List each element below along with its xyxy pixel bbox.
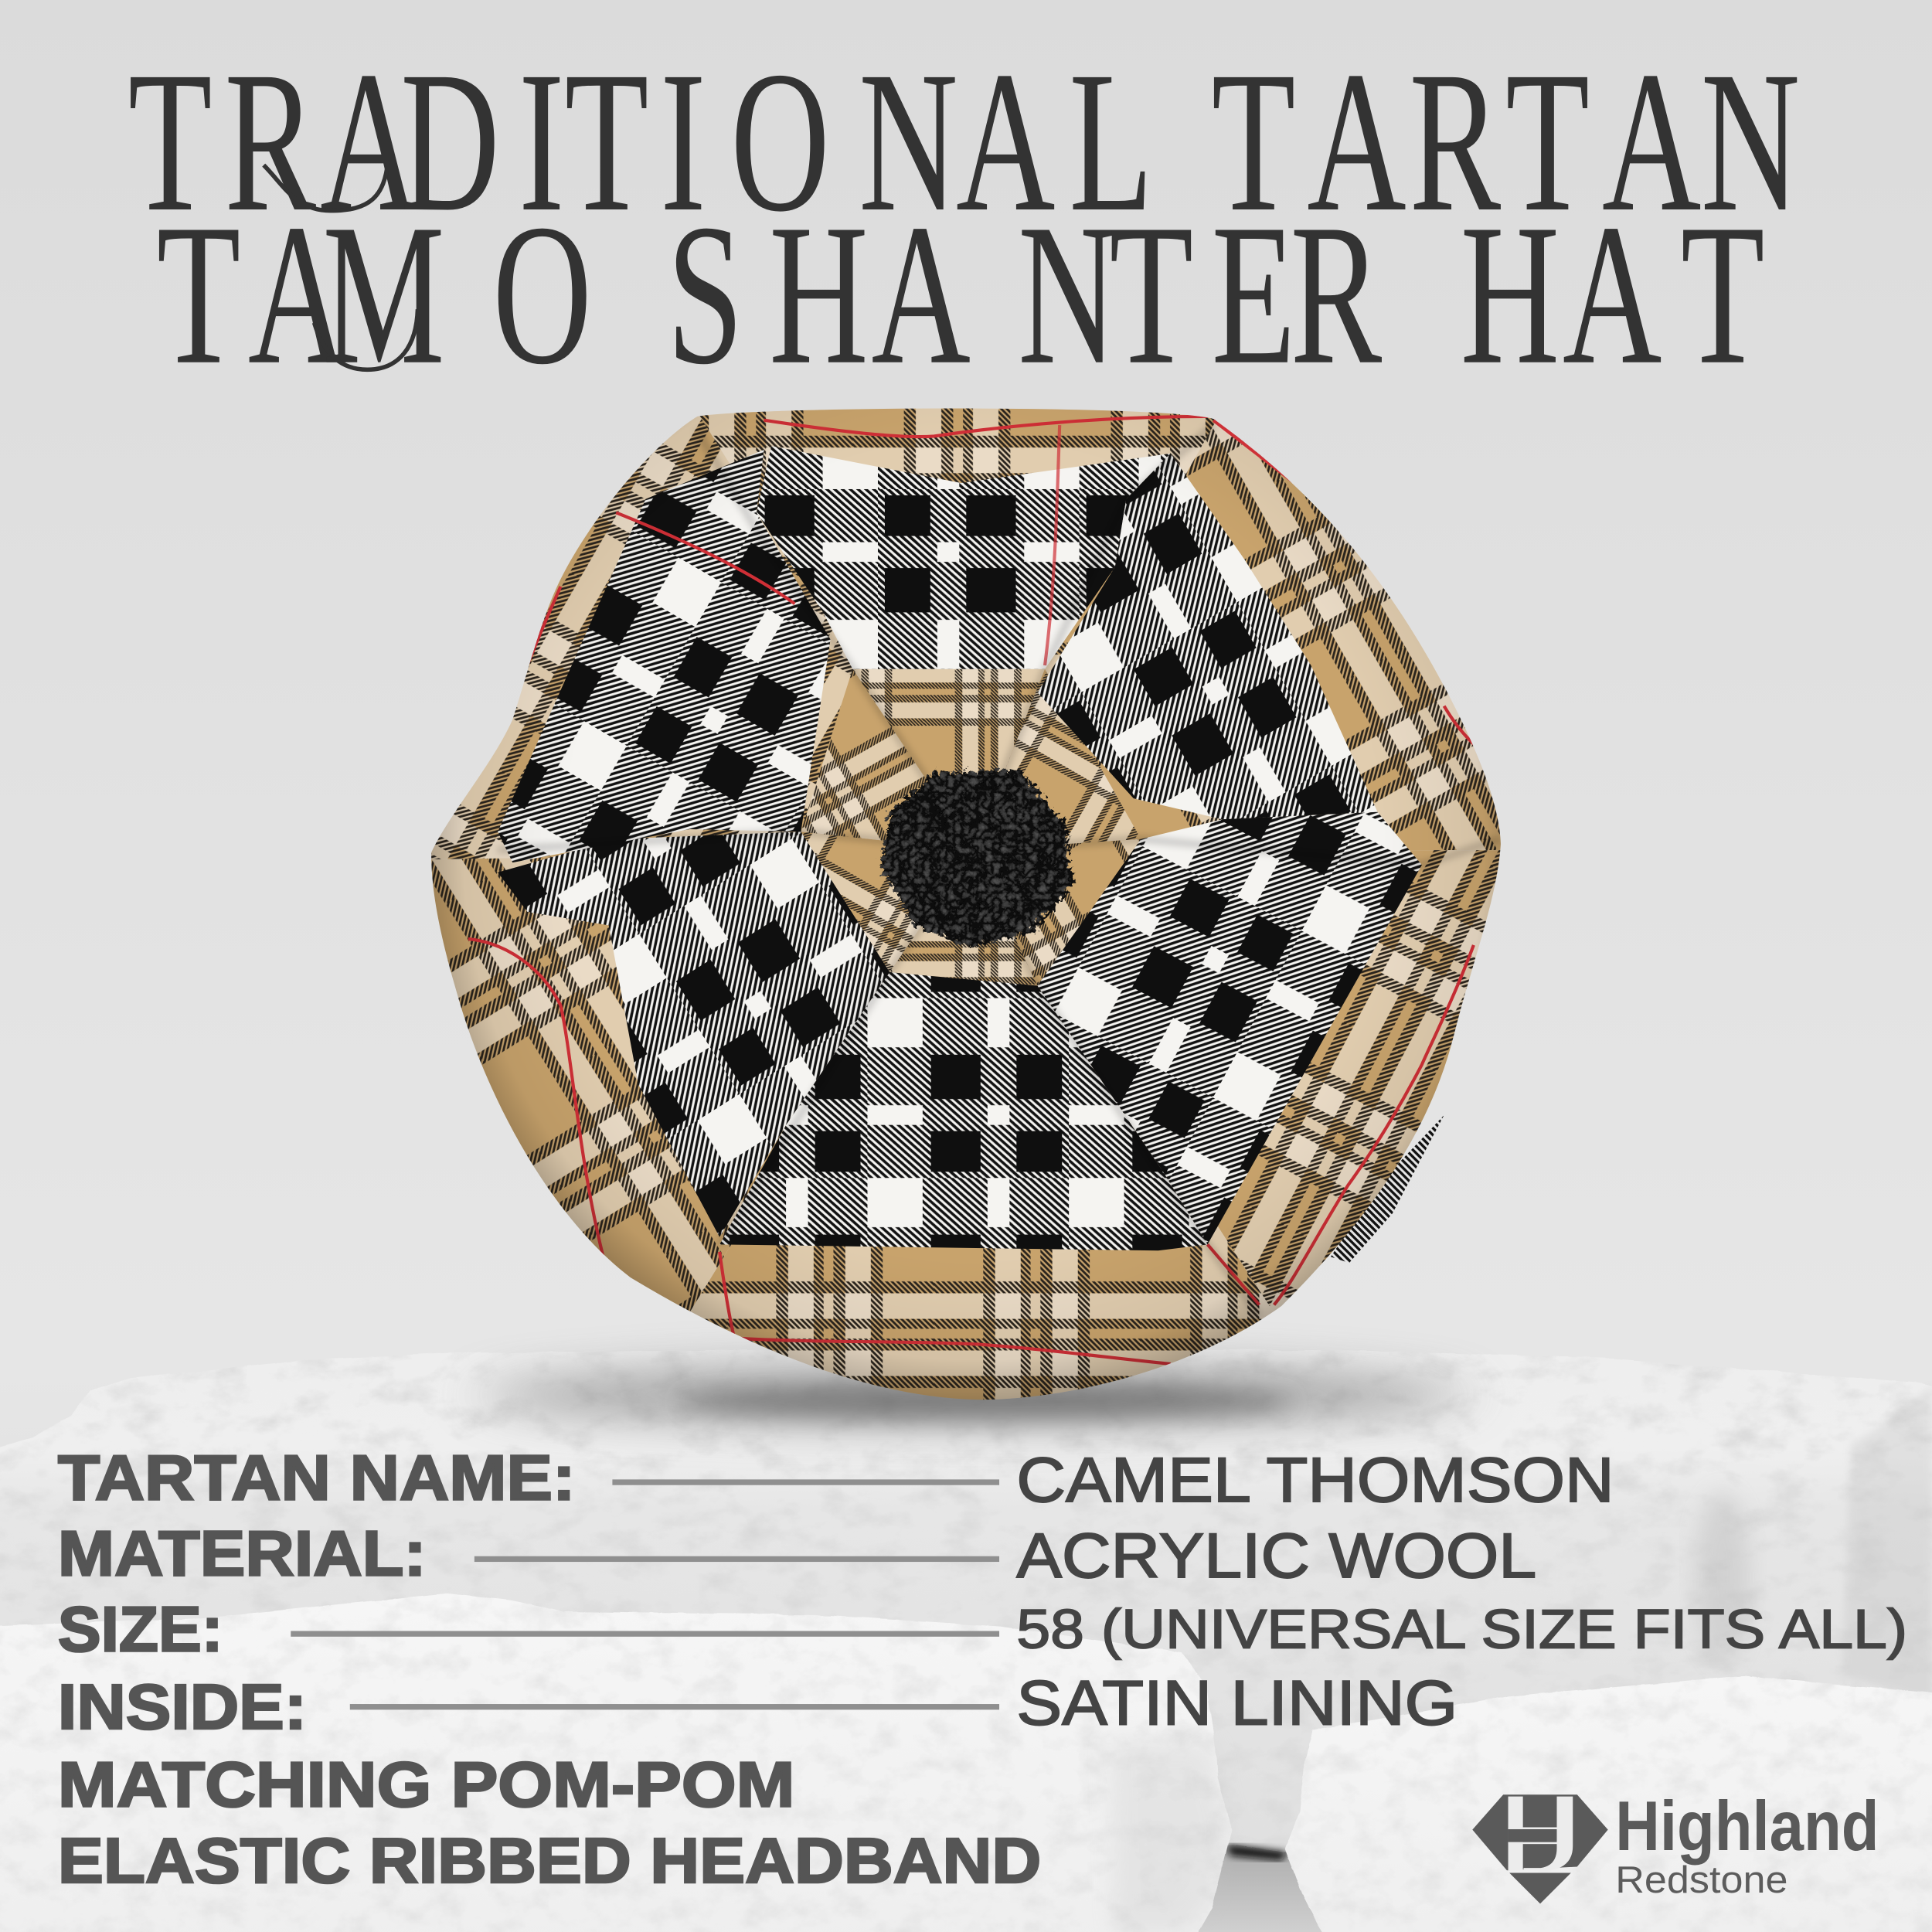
panel: lower left black and white tartan bbox=[498, 832, 889, 1237]
outer camel tartan facets bbox=[431, 408, 1501, 1400]
swash: A and M ligature bbox=[315, 309, 417, 369]
hat fabric bbox=[431, 408, 1501, 1400]
specification list bbox=[58, 1441, 1907, 1896]
seam on upper right edge bbox=[1213, 420, 1355, 530]
crease shadows bbox=[498, 425, 1499, 1316]
floor shadow bbox=[1226, 1845, 1287, 1861]
centre camel wedges bbox=[801, 669, 1141, 986]
lower left rock bbox=[0, 1594, 1232, 1932]
lower left rock side shading bbox=[1109, 1737, 1230, 1932]
pom-pom bbox=[877, 767, 1070, 943]
contact shadow bbox=[481, 1366, 1466, 1424]
logo mark bbox=[1472, 1794, 1608, 1903]
connector: material bbox=[474, 1556, 999, 1562]
label: size: SIZE: bbox=[58, 1593, 223, 1665]
value: tartan name: CAMEL THOMSON bbox=[1016, 1445, 1614, 1515]
stone plinths bbox=[0, 1348, 1932, 1932]
edge shading bbox=[369, 369, 1553, 1429]
rock right face bbox=[1842, 1386, 1932, 1700]
panel: lower right black and white tartan bbox=[1037, 812, 1422, 1244]
connector: size bbox=[291, 1631, 999, 1637]
title bbox=[128, 30, 1800, 406]
swash: R and A ligature bbox=[264, 160, 388, 211]
logo wordmark: Highland bbox=[1615, 1787, 1879, 1866]
panel: upper right black and white tartan bbox=[1037, 454, 1378, 819]
label: inside: INSIDE: bbox=[58, 1671, 307, 1743]
feature: pom-pom: MATCHING POM-POM bbox=[58, 1748, 794, 1820]
main rock bbox=[0, 1348, 1932, 1852]
value: material: ACRYLIC WOOL bbox=[1016, 1521, 1536, 1591]
title line 1: TRADITIONAL TARTAN bbox=[128, 30, 1800, 253]
connector: tartan name bbox=[612, 1479, 999, 1485]
panel: upper left black and white tartan bbox=[498, 450, 831, 862]
floor bbox=[1109, 1836, 1478, 1932]
label: material: MATERIAL: bbox=[58, 1517, 427, 1589]
hat lining peeking out bbox=[1331, 1115, 1444, 1263]
label: tartan name: TARTAN NAME: bbox=[58, 1441, 576, 1513]
panel: bottom black and white tartan bbox=[719, 972, 1207, 1250]
value: size: 58 (UNIVERSAL SIZE FITS ALL) bbox=[1016, 1598, 1907, 1660]
logo bbox=[1472, 1787, 1879, 1903]
contact shadow core bbox=[678, 1385, 1294, 1420]
rock fissure shadow bbox=[1696, 1491, 1750, 1663]
feature: headband: ELASTIC RIBBED HEADBAND bbox=[58, 1825, 1041, 1896]
logo sub-wordmark: Redstone bbox=[1615, 1859, 1787, 1901]
title line 2: TAM O SHANTER HAT bbox=[157, 183, 1764, 406]
lower right rock bbox=[1285, 1675, 1932, 1932]
connector: inside bbox=[350, 1704, 999, 1709]
hat bbox=[431, 408, 1501, 1400]
red overcheck lines bbox=[468, 417, 1496, 1364]
panel: top black and white tartan bbox=[757, 446, 1171, 669]
value: inside: SATIN LINING bbox=[1016, 1668, 1458, 1738]
